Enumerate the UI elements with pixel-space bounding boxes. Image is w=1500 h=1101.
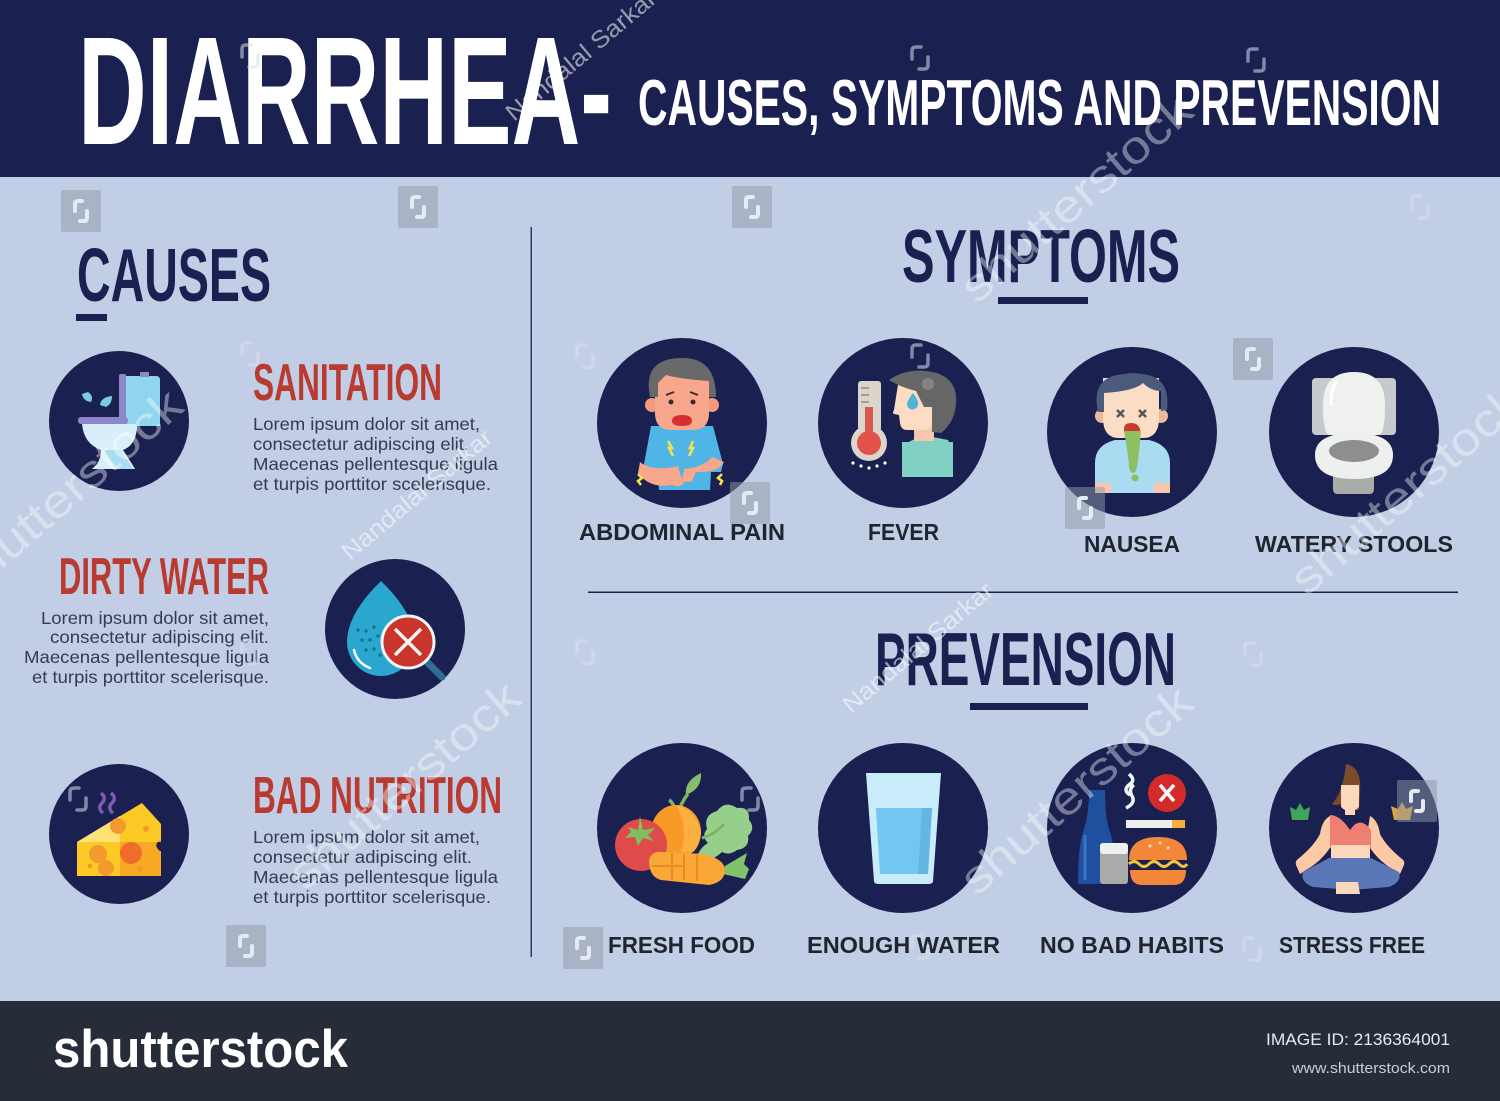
text: dirty water: DIRTY WATER [59, 548, 269, 606]
icon: man holding stomach [638, 358, 724, 490]
icon: meditating woman [1290, 764, 1413, 894]
icon: water drop with magnifier [347, 581, 442, 677]
header banner [0, 0, 1500, 177]
watermarks: shutterstock [949, 674, 1203, 905]
cause: dirty water [24, 548, 465, 699]
symptom: nausea [1047, 347, 1217, 557]
icon: thermometer and sweating head [851, 371, 956, 477]
website: www.shutterstock.com [1291, 1060, 1450, 1077]
text: bad nutrition: consectetur adipiscing elit. [253, 847, 472, 867]
label: NAUSEA [1084, 531, 1180, 557]
watermarks: Nandalal Sarkar [838, 577, 999, 719]
prevention: stress free [1269, 743, 1439, 958]
prevention: fresh food [597, 743, 767, 958]
symptom: watery stools [1255, 347, 1453, 557]
label: WATERY STOOLS [1255, 531, 1453, 557]
text: dirty water: Maecenas pellentesque ligula [24, 647, 269, 667]
text: bad nutrition: et turpis porttitor scelerisque. [253, 887, 491, 907]
symptom: fever [818, 338, 988, 545]
prevention: no bad habits [1040, 743, 1224, 958]
icon: white toilet [1312, 372, 1396, 494]
label: NO BAD HABITS [1040, 932, 1224, 958]
text: sanitation: et turpis porttitor scelerisque. [253, 474, 491, 494]
text: dirty water: consectetur adipiscing elit. [50, 627, 269, 647]
prevention: enough water [807, 743, 1000, 958]
icon: vomiting man [1095, 373, 1170, 493]
cause: sanitation [49, 351, 498, 494]
panel: causes [24, 233, 502, 907]
text: sanitation [253, 354, 498, 494]
watermarks: shutterstock [1279, 374, 1500, 605]
text: bad nutrition: Maecenas pellentesque ligula [253, 867, 498, 887]
text: bad nutrition [253, 767, 502, 907]
watermarks: shutterstock [277, 669, 531, 900]
panel: prevension [597, 617, 1439, 958]
icon: glass of water [866, 773, 941, 884]
watermarks: shutterstock [949, 82, 1203, 313]
text: sanitation: consectetur adipiscing elit. [253, 434, 469, 454]
footer logo: shutterstock [53, 1020, 348, 1079]
text: dirty water [24, 548, 269, 687]
symptom: abdominal pain [579, 338, 785, 545]
text: sanitation: Maecenas pellentesque ligula [253, 454, 498, 474]
label: FEVER [868, 519, 939, 545]
icon: toilet [78, 372, 160, 469]
watermarks: Nandalal Sarkar [337, 424, 498, 566]
icon: fruit and vegetables [615, 773, 752, 885]
text: dirty water: et turpis porttitor scelerisque. [32, 667, 269, 687]
icon: cheese [77, 793, 161, 876]
text: dirty water: Lorem ipsum dolor sit amet, [41, 608, 269, 628]
footer bar [0, 1001, 1500, 1101]
label: STRESS FREE [1279, 932, 1425, 958]
causes heading: CAUSES [77, 233, 271, 317]
label: ENOUGH WATER [807, 932, 1000, 958]
title: DIARRHEA- [78, 5, 612, 177]
text: bad nutrition: Lorem ipsum dolor sit amet, [253, 827, 480, 847]
prevension heading: PREVENSION [875, 617, 1176, 701]
label: ABDOMINAL PAIN [579, 519, 785, 545]
label: FRESH FOOD [608, 932, 755, 958]
symptoms heading: SYMPTOMS [902, 214, 1180, 298]
icon: bottle, cigarette, burger [1078, 774, 1187, 885]
text: sanitation: SANITATION [253, 354, 442, 412]
text: sanitation: Lorem ipsum dolor sit amet, [253, 414, 480, 434]
image id: IMAGE ID: 2136364001 [1266, 1030, 1450, 1049]
cause: bad nutrition [49, 764, 502, 907]
text: bad nutrition: BAD NUTRITION [253, 767, 502, 825]
panel: symptoms [579, 214, 1453, 557]
